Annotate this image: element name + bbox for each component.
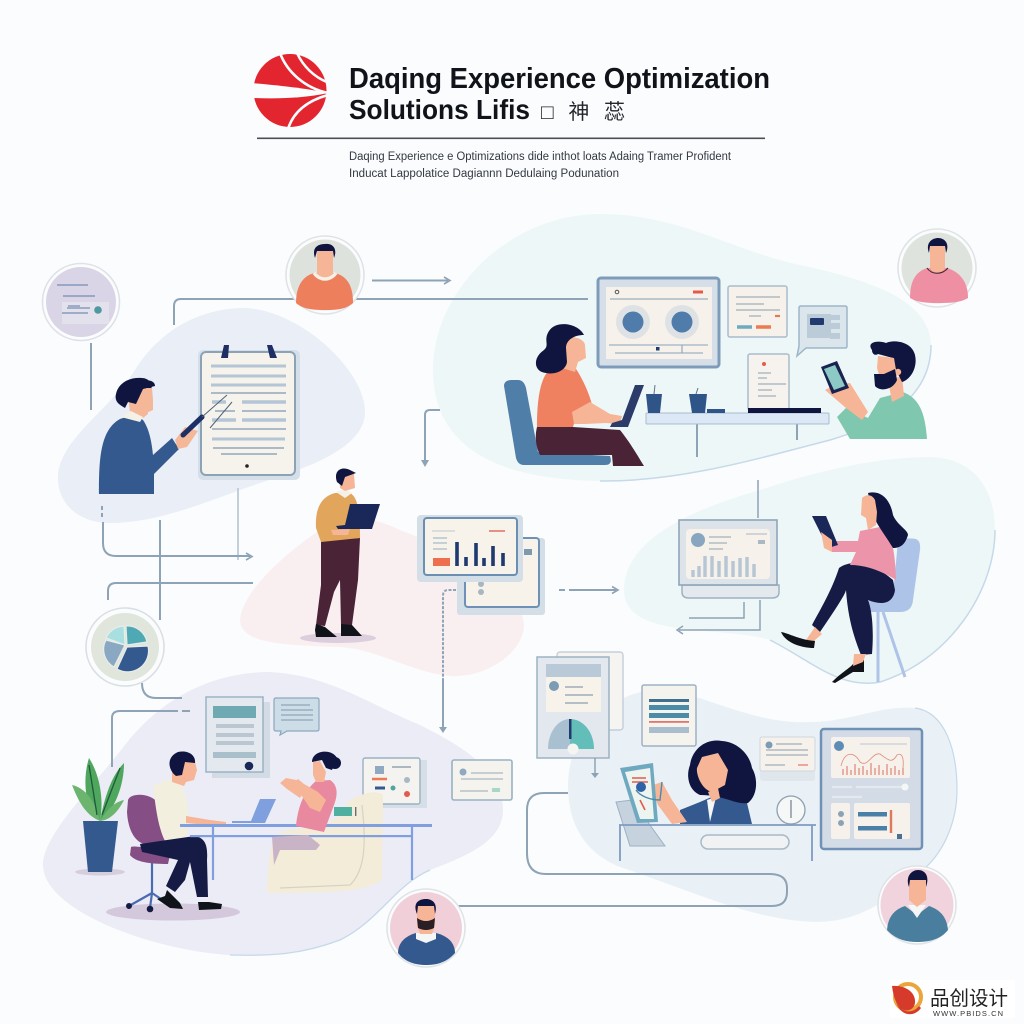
watermark name: 品创设计 [930,987,1008,1010]
panel: meeting at desk [43,672,512,955]
blob background [240,519,524,676]
gauge document [537,652,623,758]
avatar: document circle [42,264,120,340]
blob background [624,457,995,683]
blob background [433,214,931,481]
connector: long rounded line [455,793,787,906]
arrow: down from top right panel [421,410,440,467]
info card [728,286,787,337]
person: woman with tablet [620,741,756,824]
title CJK glyphs: □ 神 蕊 [541,101,625,124]
chart card back [457,538,545,615]
arrow: lower left to middle panel [102,506,252,560]
connector: plant to meeting [112,711,190,767]
report card [642,685,696,746]
small info card [452,760,512,800]
arrow: top right [372,277,450,284]
speech bubble [274,698,319,735]
intro text line 1: Daqing Experience e Optimizations dide inthot loats Adaing Tramer Profident [349,151,732,163]
panel: presenter with document board [58,308,365,523]
icon: watermark logo [892,984,921,1014]
person: presenter [99,378,232,494]
panel: team at laptop and phone [433,214,931,481]
header: logo and title [251,53,770,180]
connector lines and arrows [91,277,787,906]
person: seated man [106,752,240,920]
title line 1: Daqing Experience Optimization [349,63,770,95]
watermark url: WWW.PBIDS.CN [933,1009,1003,1018]
person: woman gesturing [272,752,356,865]
icon: potted plant [72,758,125,876]
armchair [267,792,383,893]
avatar: bearded man [387,889,465,967]
arrow: dotted down to meeting [439,590,456,733]
watermark [890,980,1015,1018]
avatar: man in blue v-neck [878,866,956,944]
connector: stem above analytics monitor [757,480,759,518]
form document [206,697,270,778]
panel: woman at desk with dashboard [537,652,957,922]
blob background [58,308,365,523]
avatar: man in orange [286,236,364,314]
connector: under monitor [689,602,744,618]
panel: presenter with chart cards [240,468,545,676]
bar chart card [417,515,523,582]
connector: second horizontal line [108,583,253,600]
laptop and table [180,799,432,880]
table [646,385,829,457]
connector: pie to meeting [142,683,182,698]
notes card [760,737,815,781]
arrow: dashed middle [559,586,618,594]
header rule [257,138,765,139]
icon: clock [777,796,805,824]
person: woman with laptop [504,324,644,466]
connector: document circle stem [90,343,92,410]
dashboard tablet [821,729,922,849]
speech card [797,306,847,356]
panel: woman with tablet and dashboard [624,457,995,683]
arrow: under monitor left [677,600,760,634]
blob background [568,690,957,922]
avatar: man in pink [898,229,976,307]
analytics monitor [679,520,779,598]
document board [198,345,300,480]
blob background [43,672,503,955]
document on table [748,354,789,410]
avatar: pie chart [86,608,164,686]
icon: red logo [251,53,328,129]
connector: vertical to pie [159,520,161,620]
connector: board stem [237,488,239,560]
person: man with phone [821,341,927,439]
person: man with laptop [300,468,380,643]
desk [619,825,816,861]
pie chart [104,626,149,672]
person: seated woman with tablet [781,492,920,683]
chart card [363,758,427,808]
title line 2: Solutions Lifis [349,94,530,125]
dashboard monitor [598,278,719,367]
laptop on desk [616,800,665,846]
arrow: below gauge document [591,758,599,778]
connector: top line from presenter panel [174,299,588,325]
intro text line 2: Inducat Lappolatice Dagiannn Dedulaing Podunation [349,168,619,180]
